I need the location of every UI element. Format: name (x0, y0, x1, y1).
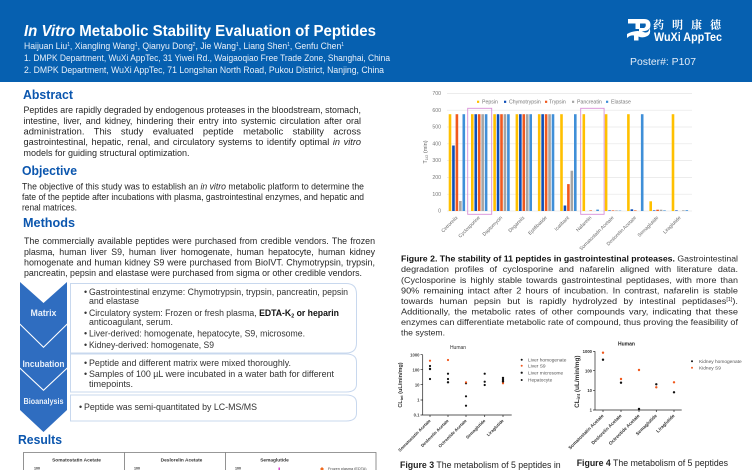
methods text: pancreatin, pepsin and elastase were purchased from sigma or other credible vendors. (24, 268, 362, 278)
y ticks: 1000 (583, 349, 593, 354)
figure 2: bar chart (423, 91, 692, 252)
panel: bioanalysis details: Peptide was semi-quantitated by LC-MS/MS (84, 402, 257, 412)
y axis labels: 300 (432, 158, 441, 164)
y axis title: (uL/min/mg) (398, 362, 404, 395)
grid lines (447, 93, 692, 211)
x labels: Somatostatin Acetate (397, 418, 432, 453)
affiliation 2: 2. DMPK Department, WuXi AppTec, 71 Longshan North Road, Pukou District, Nanjing, China (24, 65, 384, 75)
x labels: Liraglutide (486, 418, 505, 437)
authors: 2 (193, 42, 196, 48)
x axis labels: Liraglutide (662, 215, 683, 235)
figure 1 panels (24, 452, 376, 470)
y ticks: 10 (587, 388, 593, 393)
abstract text: intestine, liver, and kidney, hindering their entry into systemic circulation after oral (24, 116, 361, 126)
step: bioanalysis chevron: Bioanalysis (24, 397, 64, 406)
figure 4: kidney scatter chart (567, 342, 742, 450)
objective text: fate of the peptide after incubations with plasma, gastrointestinal enzymes, and hepatic and (22, 192, 364, 202)
y axis labels: 700 (432, 91, 441, 97)
step: bioanalysis chevron (20, 369, 67, 432)
panel: matrix details: and elastase (89, 296, 139, 306)
y axis title: CL (574, 399, 581, 408)
panel: bioanalysis details (70, 395, 356, 421)
figure 4 caption: Figure 4 The metabolism of 5 peptides (577, 458, 728, 468)
step: incubation chevron: Incubation (22, 359, 64, 369)
panel: incubation details: • (84, 358, 87, 368)
legend (691, 359, 742, 371)
poster number: Poster#: P107 (630, 57, 696, 68)
authors: , Genfu Chen (290, 41, 341, 51)
highlight: nafarelin (581, 108, 604, 214)
y axis labels: 100 (432, 192, 441, 198)
x labels: Liraglutide (655, 413, 676, 434)
methods text: homogenate and human kidney S9 were purchased from BioIVT. Chymotrypsin, trypsin, (24, 258, 375, 268)
objective heading: Objective (22, 163, 77, 178)
figure 3 caption: Figure 3 The metabolism of 5 peptides in (400, 460, 561, 470)
authors: 1 (236, 42, 239, 48)
panel: matrix details: • (84, 340, 87, 350)
panel: matrix details: or heparin (294, 308, 339, 318)
legend: Kidney homogenate (699, 359, 742, 365)
figure 2 caption: enzymes can differentiate metabolic rate of compound, thus proving the feasibility of (401, 317, 739, 327)
data points (602, 352, 675, 410)
affiliation 1: 1. DMPK Department, WuXi AppTec, 31 Yiwei Rd., Waigaoqiao Free Trade Zone, Shanghai, China (24, 53, 390, 63)
bars (449, 114, 688, 211)
legend: Liver homogenate (528, 357, 567, 363)
methods heading: Methods (23, 215, 75, 230)
x axis labels: Semaglutide (637, 215, 660, 239)
panel: incubation details: Peptide and different matrix were mixed thoroughly. (89, 358, 291, 368)
abstract text: Peptides are rapidly degraded by endogenous proteases in the bloodstream, stomach, (24, 105, 361, 115)
figure 2 caption: Additionally, the metabolic rates of other compounds vary, indicating that these (401, 306, 738, 316)
figure 1 panels: Semaglutide (260, 458, 289, 464)
panel: incubation details (70, 354, 356, 392)
y ticks (410, 352, 420, 418)
x labels: Octreotide Acetate (608, 413, 641, 446)
y ticks: 100 (585, 368, 593, 373)
x axis labels: Daptomycin (482, 215, 504, 238)
panel: matrix details (70, 284, 356, 353)
y axis labels: 0 (438, 209, 441, 215)
authors: , Liang Shen (239, 41, 287, 51)
section: results (18, 432, 376, 470)
x axis labels: Cetrorelix (440, 215, 460, 234)
legend: Trypsin (549, 100, 566, 106)
y ticks: 1 (417, 398, 420, 403)
y ticks: 100 (412, 367, 420, 372)
title: In Vitro Metabolic Stability Evaluation of Peptides (24, 23, 376, 40)
x labels: Deslorelin Acetate (420, 418, 450, 448)
y axis title: (uL/min/mg) (574, 356, 581, 394)
y ticks (583, 349, 593, 413)
panel: matrix details: Circulatory system: Frozen or fresh plasma, EDTA-K (89, 308, 292, 318)
authors: Haijuan Liu (24, 41, 68, 51)
figure 3: liver scatter chart (397, 345, 567, 453)
panel: matrix details: • (84, 287, 87, 297)
step: incubation chevron (20, 325, 67, 390)
x axis labels (440, 215, 683, 252)
authors: 1 (287, 42, 290, 48)
figure 2 caption: [1] (726, 297, 733, 303)
legend: Pepsin (482, 100, 498, 106)
logo: WuXi AppTec (627, 16, 729, 44)
y ticks: 1000 (410, 352, 420, 357)
figure 2 caption: ). (732, 296, 738, 306)
y axis labels: 500 (432, 125, 441, 131)
y axis labels: 600 (432, 108, 441, 114)
section: abstract (23, 87, 362, 158)
panel: matrix details: Kidney-derived: homogenate, S9 (89, 340, 214, 350)
y axis title: int (576, 393, 581, 399)
legend: Hepatocyte (528, 378, 553, 384)
y axis title: CL (398, 400, 404, 408)
y axis labels: 400 (432, 141, 441, 147)
panel: incubation details: • (84, 369, 87, 379)
y axis title: T (423, 160, 429, 164)
axes (593, 351, 682, 412)
y axis labels: 200 (432, 175, 441, 181)
abstract text: models for guiding structural optimization. (24, 148, 190, 158)
figure 1 panels: Somatostatin Acetate (52, 458, 101, 464)
workflow diagram (20, 282, 356, 432)
x axis labels: Deslorelin Acetate (606, 215, 638, 247)
panel: matrix details: • (84, 328, 87, 338)
authors: , Qianyu Dong (138, 41, 193, 51)
logo: WuXi AppTec: WuXi AppTec (654, 30, 722, 44)
y axis labels (432, 91, 441, 215)
chart title: Human (450, 345, 466, 351)
methods text (24, 236, 376, 278)
x labels: Semaglutide (465, 418, 487, 440)
authors: , Xiangling Wang (70, 41, 135, 51)
header banner (0, 0, 752, 82)
methods text: The commercially available peptides were purchased from credible vendors. The frozen (24, 236, 375, 246)
y ticks: 10 (415, 382, 420, 387)
legend (521, 357, 567, 384)
figure 2 caption: degradation profiles of cyclosporine and nafarelin aligned with literature data. (401, 264, 738, 274)
abstract text: administration. This study evaluated peptide metabolic stability across (24, 126, 362, 136)
figure 2 caption: (Cyclosporine is highly stable towards gastrointestinal peptidases, with more than (401, 275, 738, 285)
x axis labels: Nafarelin (575, 215, 593, 233)
x axis labels: Degarelix (507, 215, 527, 234)
legend: Pancreatin (577, 100, 602, 106)
authors: , Jie Wang (196, 41, 236, 51)
highlight: cyclosporine (468, 108, 492, 214)
legend: Chymotrypsin (509, 100, 541, 106)
x labels (397, 418, 505, 453)
legend (477, 100, 631, 106)
data points (429, 359, 504, 407)
figure 2 caption: the system. (401, 328, 445, 338)
authors: 1 (341, 42, 344, 48)
figure 2 caption (401, 254, 739, 338)
x axis labels: Icatibant (554, 215, 571, 232)
x labels: Octreotide Acetate (437, 418, 468, 449)
abstract text: gastrointestinal, hepatic, renal, and circulatory systems to identify optimal in vitro (24, 137, 361, 147)
figure 1 panels: Deslorelin Acetate (161, 458, 203, 464)
step: matrix chevron: Matrix (31, 308, 57, 318)
y axis title: (min) (423, 140, 429, 155)
axes (420, 355, 512, 417)
legend: Elastase (611, 100, 631, 106)
logo: WuXi AppTec: 药明康德 (653, 16, 729, 32)
y ticks: 0.1 (414, 413, 420, 418)
x labels: Somatostatin Acetate (567, 413, 605, 450)
panel: matrix details: Liver-derived: homogenate, hepatocyte, S9, microsome. (89, 328, 305, 338)
legend: Kidney S9 (699, 365, 721, 371)
panel: matrix details: Gastrointestinal enzyme: Chymotrypsin, trypsin, pancreatin, pepsin (89, 287, 348, 297)
legend: Liver microsome (528, 370, 564, 376)
y ticks: 1 (590, 408, 593, 413)
panel: incubation details: timepoints. (89, 379, 133, 389)
authors: 1 (67, 42, 70, 48)
methods text: plasma, human liver S9, human liver homogenate, human hepatocyte, human kidney (24, 247, 376, 257)
results heading: Results (18, 432, 62, 447)
x axis labels: Eptifibatide (527, 215, 549, 237)
figure 2 caption: towards human pepsin but is rapidly hydrolyzed by intestinal peptidases (401, 296, 702, 306)
x axis labels: Somatostatin Acetate (579, 215, 616, 252)
section: methods (23, 215, 376, 278)
section: objective (22, 163, 364, 212)
abstract text (24, 105, 362, 158)
y axis title: int (399, 395, 404, 400)
x axis labels: Cyclosporine (457, 215, 482, 239)
x labels: Semaglutide (635, 413, 658, 436)
y axis title: 1/2 (424, 154, 429, 160)
panel: matrix details: anticoagulant, serum. (89, 317, 173, 327)
x labels: Deslorelin Acetate (590, 413, 623, 446)
figure 2 caption: 90% remaining intact after 2 hours of incubation. In contrast, nafarelin is stable (401, 286, 738, 296)
objective text: The objective of this study was to establish an in vitro metabolic platform to determine the (22, 182, 364, 192)
objective text (22, 182, 364, 212)
panel: matrix details: • (84, 308, 87, 318)
panel: matrix details: 2 (291, 314, 294, 320)
legend: Liver S9 (528, 363, 546, 369)
abstract heading: Abstract (23, 87, 74, 102)
chart title: Human (618, 342, 635, 348)
objective text: renal matrices. (22, 202, 77, 212)
figure 2 caption: Figure 2. The stability of 11 peptides in gastrointestinal proteases. Gastrointestinal (401, 254, 738, 264)
x labels (567, 413, 676, 450)
step: matrix chevron (20, 282, 67, 346)
authors: 1 (135, 42, 138, 48)
panel: incubation details: Samples of 100 µL were incubated in a water bath for different (89, 369, 335, 379)
panel: bioanalysis details: • (79, 402, 82, 412)
